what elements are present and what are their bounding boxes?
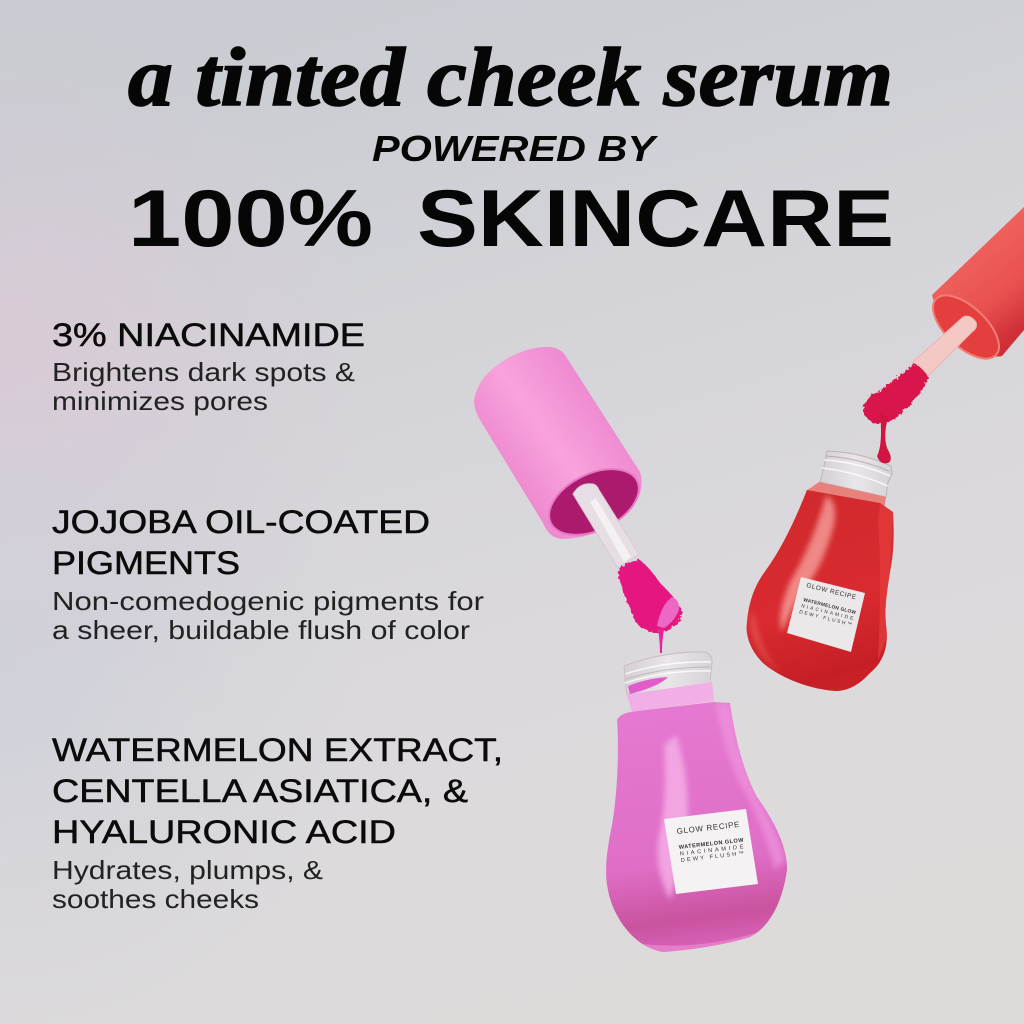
red bottle label — [787, 577, 865, 652]
pink bottle label: NIACINAMIDE — [680, 844, 746, 857]
pink bottle label: DEWY FLUSH™ — [681, 851, 747, 864]
red bottle label: GLOW RECIPE — [806, 582, 858, 602]
pink bottle neck — [624, 652, 714, 712]
pink applicator gloss — [657, 597, 679, 628]
red bottle neck — [806, 451, 892, 510]
benefit: watermelon, centella, hyaluronic acid: WATERMELON EXTRACT, — [52, 732, 503, 768]
benefit: jojoba oil-coated pigments: Non-comedogenic pigments for — [52, 586, 484, 616]
benefit: watermelon, centella, hyaluronic acid: HYALURONIC ACID — [52, 814, 396, 850]
pink bottle label — [664, 809, 758, 894]
benefit: niacinamide: Brightens dark spots & — [52, 357, 355, 387]
pink bottle label: WATERMELON GLOW — [679, 838, 745, 851]
red wand — [913, 316, 976, 376]
headline: 100% skincare — [128, 174, 894, 264]
title: a tinted cheek serum — [128, 31, 893, 124]
headline: 100% skincare: 100% — [128, 174, 373, 264]
pink bottle — [474, 347, 795, 960]
pink wand sheen — [590, 498, 631, 562]
benefit: jojoba oil-coated pigments: JOJOBA OIL-COATED — [52, 504, 430, 540]
benefit: jojoba oil-coated pigments: PIGMENTS — [52, 545, 240, 581]
pink drip — [658, 628, 664, 653]
red applicator — [863, 364, 928, 424]
red bottle label: DEWY FLUSH™ — [799, 609, 854, 628]
benefit: niacinamide — [52, 317, 365, 416]
headline: 100% skincare: SKINCARE — [417, 174, 894, 264]
benefit: watermelon, centella, hyaluronic acid: soothes cheeks — [52, 884, 259, 914]
red cap — [932, 207, 1024, 357]
red cap opening — [922, 284, 1010, 370]
benefit: niacinamide: minimizes pores — [52, 386, 268, 416]
pink cap opening — [539, 456, 649, 548]
pink applicator — [618, 560, 682, 633]
red bottle label: NIACINAMIDE — [801, 603, 855, 622]
red bottle label: WATERMELON GLOW — [803, 597, 857, 616]
pink wand — [573, 484, 639, 568]
pink cap — [474, 347, 642, 539]
benefit: jojoba oil-coated pigments: a sheer, buildable flush of color — [52, 615, 470, 645]
red bottle body — [746, 490, 894, 691]
benefit: watermelon, centella, hyaluronic acid: CENTELLA ASIATICA, & — [52, 773, 468, 809]
red drip — [877, 412, 891, 463]
benefit: watermelon, centella, hyaluronic acid: Hydrates, plumps, & — [52, 855, 323, 885]
pink bottle body — [606, 702, 787, 952]
pink bottle label: GLOW RECIPE — [676, 820, 741, 836]
benefit: niacinamide: 3% NIACINAMIDE — [52, 317, 365, 353]
red bottle — [740, 207, 1024, 700]
benefit: jojoba oil-coated pigments — [52, 504, 484, 645]
benefit: watermelon, centella, hyaluronic acid — [52, 732, 503, 914]
subtitle: powered by: POWERED BY — [372, 128, 658, 169]
